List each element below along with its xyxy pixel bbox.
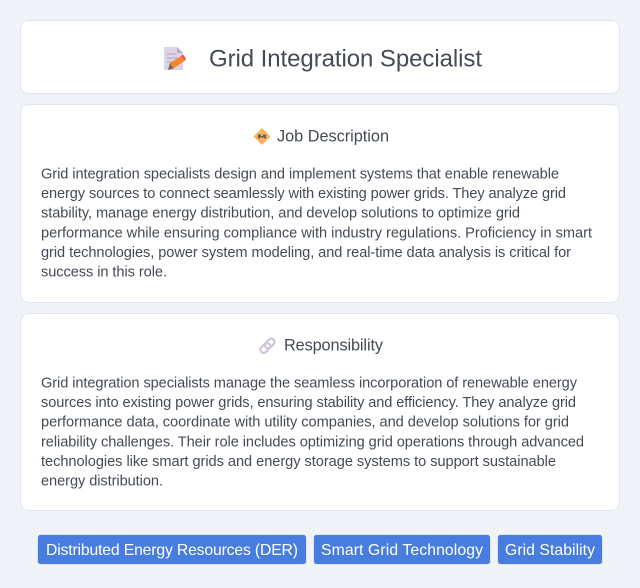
title: Grid Integration Specialist (209, 46, 482, 72)
icon: orange diamond sign (254, 128, 270, 145)
text block: responsibility: sources into existing power grids, ensuring stability and efficiency. They analyze grid (41, 395, 576, 411)
text block: job description (41, 166, 592, 280)
text block: job description: energy sources to connect seamlessly with existing power grids. They analyze grid (41, 186, 566, 202)
text block: job description: Grid integration specialists design and implement systems that enable renewable (41, 166, 559, 182)
heading: job description: Job Description (277, 128, 389, 146)
text block: responsibility: Grid integration specialists manage the seamless incorporation of renewable energy (41, 376, 578, 392)
panel: job description (20, 104, 620, 302)
text block: responsibility: reliability challenges. Their role includes optimizing grid operations through advanced (41, 434, 584, 450)
text block: responsibility (41, 376, 584, 490)
tag: grid stability: Grid Stability (505, 542, 595, 559)
tag: distributed energy resources: Distributed Energy Resources (DER) (46, 542, 298, 559)
text block: responsibility: technologies like smart grids and energy storage systems to support sustainable (41, 454, 556, 470)
icon: memo with pencil (164, 47, 186, 70)
tag: smart grid technology (314, 534, 490, 564)
icon: chain link (259, 337, 276, 354)
tag: distributed energy resources (38, 534, 306, 564)
panel: responsibility (20, 314, 620, 510)
text block: job description: performance while ensuring compliance with industry regulations. Proficiency in smart (41, 225, 592, 241)
tag: grid stability (498, 534, 602, 564)
text block: responsibility: performance data, coordinate with utility companies, and develop solutions for grid (41, 415, 569, 431)
heading: responsibility: Responsibility (284, 336, 384, 354)
text block: responsibility: energy distribution. (41, 474, 163, 490)
text block: job description: success in this role. (41, 264, 167, 280)
text block: job description: grid technologies, power system modeling, and real-time data analysis is critical for (41, 245, 571, 261)
text block: job description: stability, manage energy distribution, and develop solutions to optimize grid (41, 206, 520, 222)
panel: title header (20, 20, 620, 94)
tag: smart grid technology: Smart Grid Technology (321, 542, 483, 559)
